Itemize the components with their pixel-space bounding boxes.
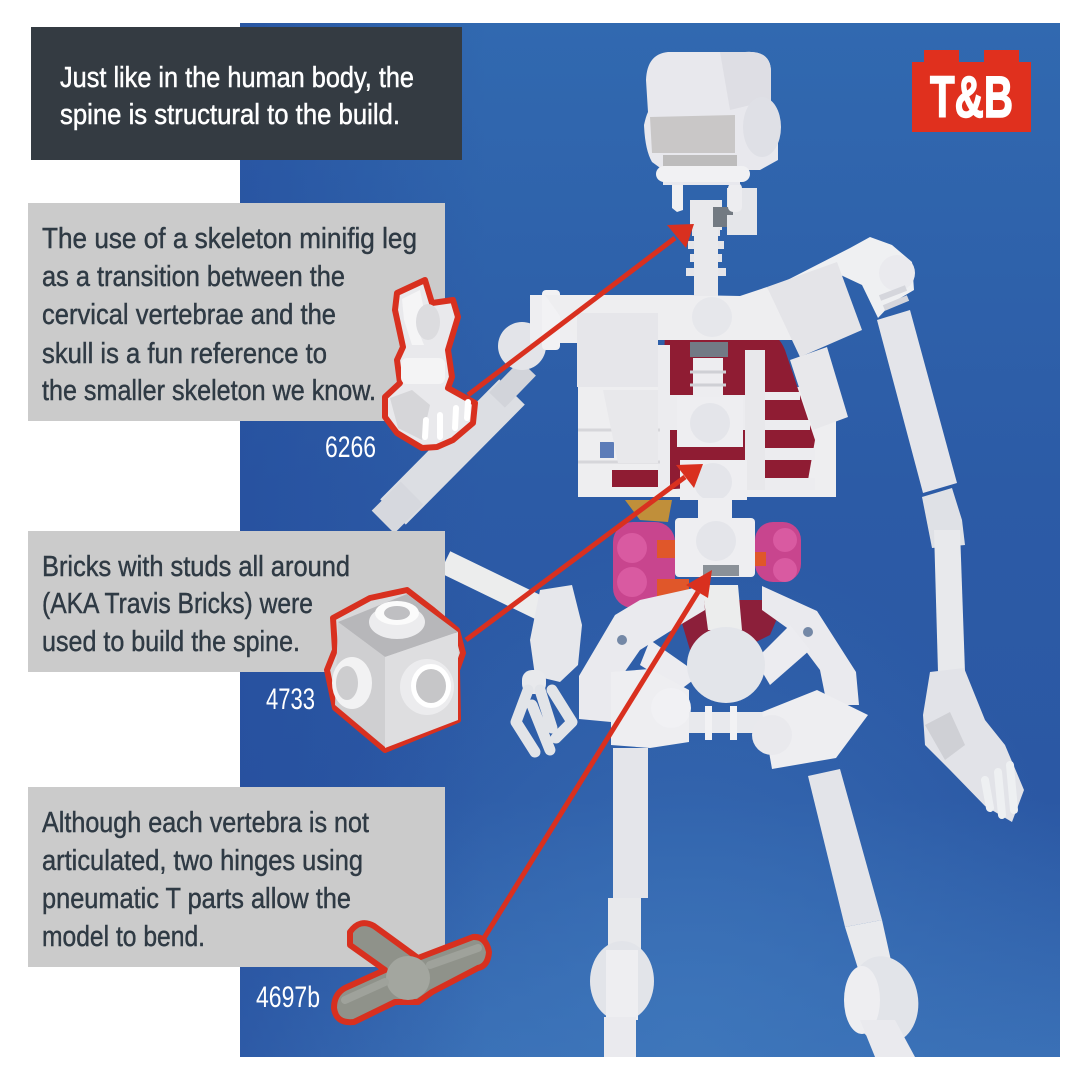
heading panel: Just like in the human body, the xyxy=(60,62,414,94)
heading panel xyxy=(31,27,462,160)
neck xyxy=(672,183,757,296)
right arm xyxy=(762,237,1024,822)
heading panel: spine is structural to the build. xyxy=(60,99,400,131)
panel: Travis brick note: Bricks with studs all around xyxy=(42,551,350,583)
part icon: 6266 skeleton leg xyxy=(385,280,475,448)
left arm xyxy=(383,290,590,752)
part number: 4697b: 4697b xyxy=(256,981,320,1014)
panel: pneumatic T note: pneumatic T parts allow the xyxy=(42,883,351,915)
logo: T&B red brick: T&B xyxy=(930,65,1013,130)
arrow: pneumatic T to spine hinge xyxy=(484,570,712,938)
panel: Travis brick note: (AKA Travis Bricks) were xyxy=(42,588,313,620)
photo background: blue backdrop xyxy=(240,23,1060,1057)
part number: 6266: 6266 xyxy=(325,431,376,464)
panel: skeleton leg note: cervical vertebrae and the xyxy=(42,299,336,331)
panel: Travis brick note: used to build the spine. xyxy=(42,626,300,658)
panel: pneumatic T note: Although each vertebra is not xyxy=(42,807,369,839)
part number: 4733: 4733 xyxy=(266,683,315,716)
pelvis and magenta organs xyxy=(579,500,859,722)
torso front plates and spine studs xyxy=(545,262,862,577)
part icon: 4733 brick with studs xyxy=(327,590,463,750)
panel: skeleton leg note: the smaller skeleton we know. xyxy=(42,375,376,407)
legs xyxy=(590,669,925,1057)
panel: skeleton leg note xyxy=(28,203,445,421)
part icon: 4697b pneumatic T xyxy=(334,923,489,1022)
skull xyxy=(644,52,781,185)
panel: Travis brick note xyxy=(28,531,445,672)
arrow: skeleton leg to neck xyxy=(468,224,694,395)
panel: pneumatic T note: model to bend. xyxy=(42,921,205,953)
logo: T&B red brick xyxy=(912,50,1031,132)
panel: skeleton leg note: skull is a fun reference to xyxy=(42,338,327,370)
panel: skeleton leg note: The use of a skeleton minifig leg xyxy=(42,223,417,255)
LEGO skeleton model xyxy=(383,52,1024,1057)
panel: pneumatic T note: articulated, two hinges using xyxy=(42,845,363,877)
panel: skeleton leg note: as a transition between the xyxy=(42,261,345,293)
panel: pneumatic T note xyxy=(28,787,445,967)
arrow: Travis brick to spine xyxy=(466,464,703,640)
rib cage xyxy=(578,325,836,497)
